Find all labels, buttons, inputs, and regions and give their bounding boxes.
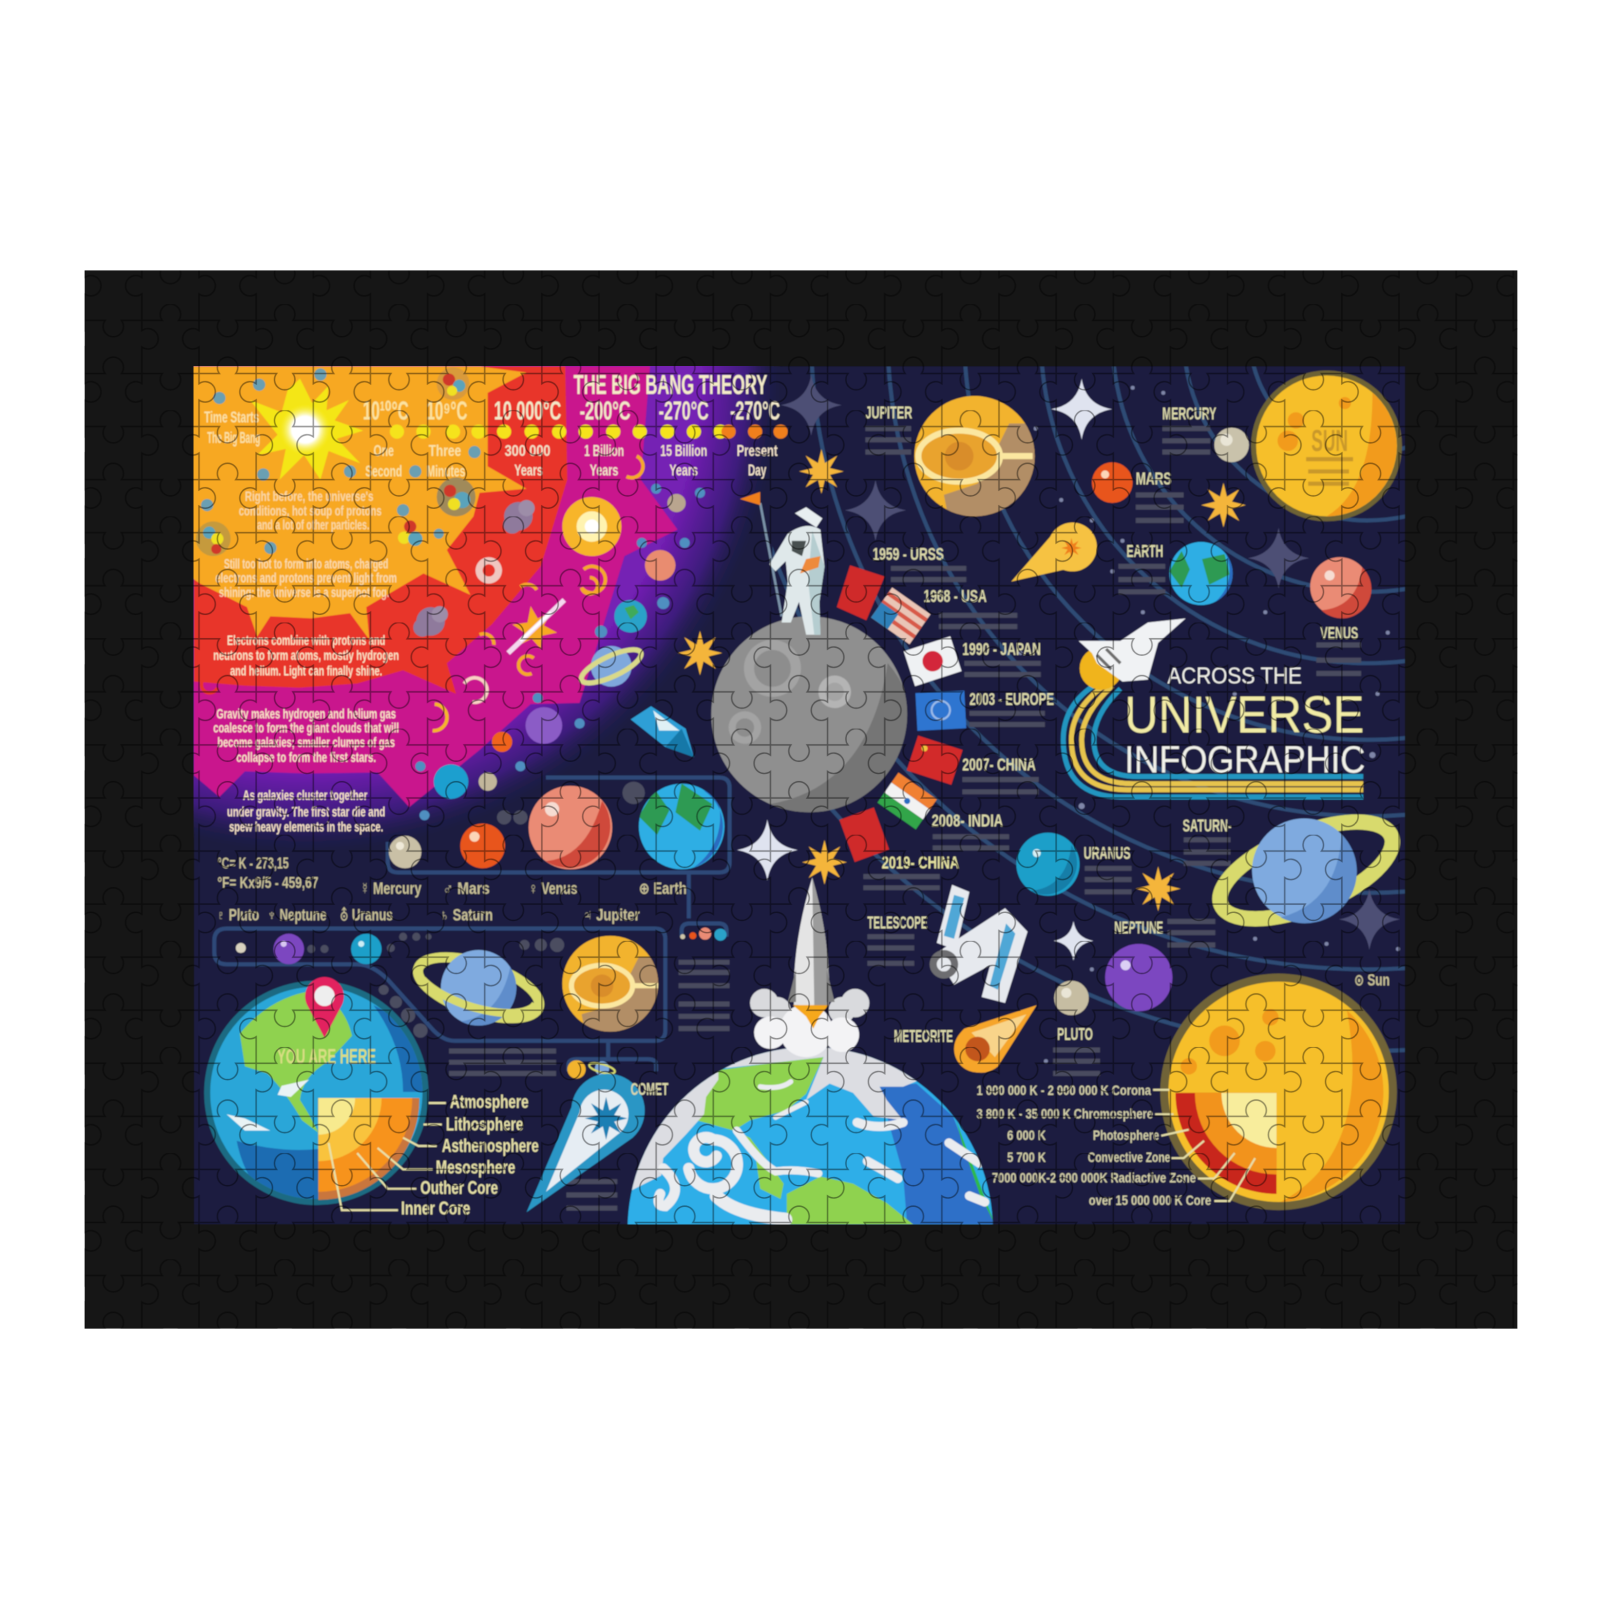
sun layer labels: 3 800 K - 35 000 K Chromosphere	[977, 1106, 1153, 1122]
sun layer labels: 6 000 K	[1007, 1128, 1046, 1144]
planet: mars	[1092, 462, 1133, 503]
planet: uranus	[1016, 833, 1080, 896]
earth cross-section globe	[204, 977, 429, 1205]
gray molecule clouds	[413, 500, 535, 637]
bars: telescope notes	[867, 937, 914, 963]
dark ocean	[880, 1084, 995, 1224]
layer names: Lithosphere	[446, 1114, 523, 1135]
white sparkle stars	[737, 379, 1112, 961]
time labels	[204, 409, 778, 481]
planet symbols row two: ♄ Saturn	[440, 906, 493, 924]
sun top	[1251, 370, 1402, 521]
sun layer labels: Convective Zone	[1088, 1150, 1170, 1166]
temperature formulas: °C= K - 273,15	[217, 855, 289, 872]
small ringed planet	[577, 643, 645, 689]
bars: saturn notes	[449, 1051, 556, 1073]
rocket trail stripes	[1063, 684, 1363, 797]
mission labels: 2019- CHINA	[882, 852, 960, 872]
planet and object labels: METEORITE	[894, 1026, 953, 1046]
astronaut suit	[769, 507, 824, 635]
bars: venus notes	[1316, 645, 1361, 673]
temperature formulas	[217, 855, 318, 892]
globe rim	[204, 981, 429, 1205]
sun cross-section	[1160, 973, 1397, 1210]
temperature row: 10 000°C	[494, 397, 561, 425]
layer leader lines	[329, 1103, 446, 1210]
bars: space mission notes	[863, 568, 1045, 888]
main title: UNIVERSE	[1124, 687, 1364, 745]
orange flag	[740, 492, 760, 505]
bars: mars notes	[1136, 495, 1184, 520]
mission labels: 1990 - JAPAN	[962, 639, 1041, 659]
paragraph: first instants: and a lot of other particles.	[257, 518, 369, 534]
planet: neptune mini	[273, 934, 304, 964]
supernova streak	[508, 600, 564, 653]
bars: comet notes	[566, 1182, 617, 1208]
magenta burst layer	[194, 366, 678, 807]
globe layered wedge	[318, 1098, 419, 1200]
planet and object labels: PLUTO	[1057, 1024, 1093, 1044]
paragraph: hot fog: shining: the universe is a superhot fog.	[219, 585, 389, 601]
puzzle board	[85, 270, 1517, 1329]
planet: pluto	[1054, 981, 1089, 1015]
infographic artwork	[194, 366, 1406, 1224]
sun layer labels: over 15 000 000 K Core	[1089, 1193, 1211, 1209]
orange burst layer	[190, 366, 527, 640]
big bang title: THE BIG BANG THEORY	[573, 369, 767, 400]
comet blue	[527, 1074, 645, 1212]
mission labels: 2003 - EUROPE	[969, 689, 1054, 709]
rocket launch	[750, 878, 869, 1057]
flag: USSR	[837, 565, 885, 620]
planet symbols row one: ♂ Mars	[443, 880, 490, 898]
layer names: Atmosphere	[450, 1091, 529, 1112]
star field	[1018, 385, 1401, 1064]
layer names: Asthenosphere	[442, 1135, 539, 1156]
temperature row: -270°C	[659, 397, 709, 425]
paragraph: hot fog: Still too hot to form into atoms, charged	[224, 556, 388, 572]
time labels: Minutes	[427, 464, 465, 481]
mini sun and saturn	[567, 1060, 616, 1079]
layer names: Mesosphere	[436, 1156, 515, 1177]
bracket: inner planets	[388, 778, 730, 937]
central earth	[624, 1047, 995, 1412]
flag: USA	[871, 587, 931, 644]
time labels: Time Starts	[204, 409, 259, 426]
planet symbols row one: ♀ Venus	[529, 880, 578, 898]
planet: venus	[1310, 557, 1371, 618]
paragraph: gravity: collapse to form the first stars.	[236, 750, 376, 766]
paragraph: first instants	[239, 489, 382, 534]
paragraph: gravity: Gravity makes hydrogen and helium gas	[216, 706, 396, 722]
bars: mercury notes	[1162, 429, 1210, 452]
time labels: Years	[669, 463, 698, 480]
paragraph: gravity: become galaxies; smaller clumps of gas	[217, 735, 395, 751]
main title	[1124, 663, 1365, 780]
paragraph: first instants: conditions, hot soup of protons	[239, 503, 382, 519]
planet and object labels: URANUS	[1084, 843, 1131, 863]
flag: USSR second	[839, 807, 889, 862]
temperature row: 10⁹°C	[427, 397, 467, 425]
bars: saturn right notes	[1184, 840, 1231, 863]
mission labels	[872, 544, 1054, 872]
paragraph: galaxies: As galaxies cluster together	[243, 788, 368, 804]
sun layer labels: 1 000 000 K - 2 000 000 K Corona	[977, 1083, 1152, 1099]
paragraph: first atoms	[213, 633, 399, 680]
globe ocean	[210, 987, 422, 1199]
time labels: Years	[590, 463, 618, 480]
planet symbols row two: ♃ Jupiter	[583, 906, 640, 924]
space telescope	[930, 885, 1028, 1003]
sun layer labels: Photosphere	[1093, 1128, 1159, 1144]
planet: earth	[1169, 542, 1235, 606]
mission labels: 2007- CHINA	[962, 754, 1036, 774]
temperature row	[362, 400, 780, 421]
flag pole	[760, 503, 782, 616]
paragraph: gravity	[213, 706, 399, 766]
sun layer labels	[977, 1083, 1255, 1209]
planet and object labels: VENUS	[1320, 623, 1358, 643]
purple nebula layer	[0, 0, 786, 857]
sun legend: ⊙ Sun	[1354, 972, 1390, 990]
you are here label: YOU ARE HERE	[277, 1044, 376, 1068]
time labels: Present	[737, 443, 778, 460]
paragraph: first atoms: Electrons combine with protons and	[227, 633, 385, 649]
time labels: 1 Billion	[584, 443, 624, 460]
blue particle dots	[201, 368, 481, 554]
small planets in the nebula	[434, 494, 686, 799]
planet and object labels: TELESCOPE	[867, 913, 928, 933]
flag: Europe	[915, 691, 966, 731]
bars: neptune notes	[1167, 921, 1215, 945]
main title: ACROSS THE	[1167, 663, 1302, 689]
mission labels: 1959 - URSS	[872, 544, 944, 564]
paragraph: gravity: coalesce to form the giant clouds that will	[213, 721, 399, 737]
bars: uranus notes	[1085, 868, 1132, 892]
mission labels: 1968 - USA	[923, 586, 987, 606]
sun title: SUN	[1311, 424, 1348, 458]
time labels: Years	[514, 463, 543, 480]
planet and object labels: SATURN-	[1183, 816, 1232, 836]
globe clouds	[227, 1080, 309, 1131]
planet and object labels: EARTH	[1127, 541, 1163, 561]
planet symbols row one: ⊕ Earth	[639, 880, 687, 898]
planet and object labels	[865, 402, 1358, 1046]
planet: venus large	[529, 786, 612, 869]
red burst layer	[194, 366, 567, 694]
north land	[697, 1057, 823, 1131]
rocket flame	[793, 1005, 829, 1029]
time labels: One	[373, 443, 394, 460]
globe continents	[237, 992, 429, 1204]
planet and object labels: NEPTUNE	[1114, 918, 1163, 938]
mini planets row	[680, 928, 727, 941]
astronaut and flag	[740, 492, 824, 635]
planet: jupiter middle	[562, 936, 663, 1036]
orbit lines	[772, 366, 1406, 1054]
paragraph: first atoms: and helium. Light can finally shine.	[230, 664, 382, 680]
puzzle cut lines	[85, 270, 1517, 1329]
moon	[711, 616, 912, 826]
gray sparkle stars	[781, 374, 1400, 950]
planet: saturn large	[1207, 802, 1405, 939]
planet: earth large	[639, 784, 724, 869]
planet: mercury small	[389, 836, 421, 868]
main title: INFOGRAPHIC	[1124, 738, 1365, 780]
planet: mercury	[1214, 428, 1249, 462]
planet: jupiter top	[914, 396, 1041, 520]
comet orange	[1011, 522, 1097, 582]
white swirl clouds	[659, 1082, 985, 1219]
bracket: outer planets	[214, 929, 665, 1071]
gold stars	[678, 449, 1246, 911]
ice cap top	[714, 1047, 920, 1120]
green rim	[956, 1120, 995, 1224]
big bang glow	[282, 406, 329, 454]
paragraph: galaxies: spew heavy elements in the space.	[229, 820, 383, 836]
paragraph: first instants: Right before, the universe's	[245, 489, 374, 505]
planet: neptune	[1105, 944, 1172, 1011]
placeholder text bars	[449, 429, 1361, 1208]
spiral galaxy	[562, 497, 621, 556]
time labels: 15 Billion	[660, 443, 707, 460]
mission labels: 2008- INDIA	[932, 811, 1003, 831]
planet: mars small	[460, 823, 505, 868]
planet: uranus mini	[351, 934, 382, 964]
space background	[194, 366, 1405, 1224]
paragraph: galaxies	[227, 788, 385, 836]
temperature row: 10¹⁰°C	[363, 397, 409, 425]
yellow sun burst	[250, 379, 363, 480]
panel: big bang timeline	[204, 369, 788, 481]
paragraph: hot fog: electrons and protons prevent light from	[215, 571, 397, 587]
space shuttle	[1063, 618, 1363, 797]
comet label: COMET	[631, 1079, 669, 1099]
layer names: Outher Core	[420, 1177, 498, 1198]
bars: jupiter notes	[865, 429, 911, 452]
ice cap left	[624, 1065, 718, 1194]
sun layer labels: 5 700 K	[1007, 1150, 1046, 1166]
paragraph: first atoms: neutrons to form atoms, mostly hydrogen	[213, 648, 399, 664]
sun layered wedge	[1176, 1093, 1277, 1194]
rocket smoke	[750, 989, 869, 1057]
blue dots around planets	[415, 484, 705, 820]
meteorite	[954, 1005, 1037, 1073]
flag: Japan	[904, 636, 962, 686]
planet symbols row one: ☿ Mercury	[360, 880, 421, 898]
planet symbols row two: ♆ Neptune	[267, 906, 327, 924]
planet symbols row two: ♇ Pluto	[216, 906, 259, 924]
atom clusters	[196, 367, 476, 556]
planet symbols row two: ⛢ Uranus	[340, 906, 393, 924]
timeline dots	[390, 424, 788, 439]
planet: pluto mini	[236, 943, 246, 953]
planet: saturn middle	[411, 945, 546, 1031]
time labels: Three	[429, 443, 461, 460]
layer names	[401, 1091, 539, 1218]
temperature row: -270°C	[730, 397, 780, 425]
bars: earth notes	[1118, 566, 1165, 592]
time labels: 300 000	[505, 443, 551, 460]
south land	[787, 1177, 913, 1224]
flag: China	[907, 735, 963, 785]
temperature row: -200°C	[580, 397, 631, 425]
crystal asteroid	[631, 706, 694, 757]
temperature formulas: °F= Kx9/5 - 459,67	[217, 875, 318, 892]
small spiral galaxies	[201, 456, 643, 731]
paragraph: galaxies: under gravity. The first star die and	[227, 804, 385, 820]
layer names: Inner Core	[401, 1197, 470, 1218]
bars: inner planet notes	[679, 962, 730, 1029]
planet and object labels: MARS	[1136, 469, 1171, 489]
bars: pluto notes	[1053, 1050, 1100, 1073]
sun layer labels: 7000 000K-2 000 000K Radiactive Zone	[992, 1171, 1196, 1187]
land strips	[735, 1131, 784, 1199]
time labels: The Big Bang	[207, 430, 260, 447]
flag: India	[877, 773, 937, 830]
rocket body	[794, 878, 829, 1005]
earth layer labels	[329, 1091, 539, 1218]
planet symbols row one	[360, 880, 687, 898]
planet and object labels: MERCURY	[1162, 403, 1217, 423]
decorative gray dots	[307, 782, 645, 1038]
text blocks: universe history	[213, 489, 399, 836]
location pin	[305, 977, 344, 1038]
time labels: Day	[748, 463, 767, 480]
planet and object labels: JUPITER	[865, 402, 913, 422]
time labels: Second	[365, 464, 402, 481]
planet symbols row two	[216, 906, 640, 924]
paragraph: hot fog	[215, 556, 397, 601]
flags ring	[837, 565, 966, 862]
